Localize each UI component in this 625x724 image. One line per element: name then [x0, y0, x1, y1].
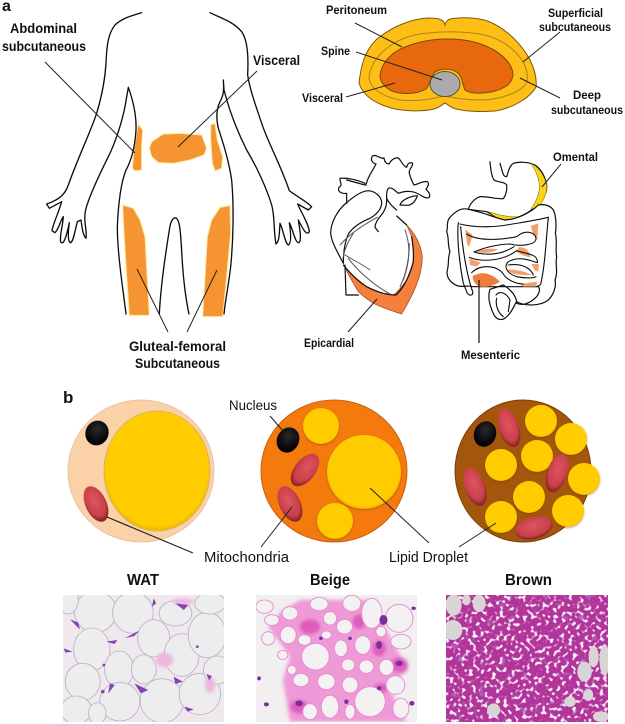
cross-section labels: Visceral — [302, 93, 343, 105]
leader lines: cells — [107, 416, 496, 553]
cross-section labels — [302, 5, 623, 117]
cell: beige adipocyte — [261, 400, 407, 542]
label: Gluteal-femoral Subcutaneous: Gluteal-femoral — [129, 339, 226, 354]
label: Visceral: Visceral — [253, 53, 300, 68]
spine — [430, 72, 460, 96]
small intestine outlines — [467, 232, 537, 284]
label: Mitochondria: Mitochondria — [204, 550, 290, 566]
illustration: heart with epicardial fat — [331, 155, 430, 314]
label: Abdominal subcutaneous: subcutaneous — [2, 39, 86, 54]
label: Gluteal-femoral Subcutaneous: Subcutaneous — [135, 356, 220, 371]
label: Nucleus: Nucleus — [229, 397, 277, 413]
fascia line — [369, 32, 527, 101]
epicardial fat — [345, 225, 422, 314]
histology: Brown — [443, 594, 610, 722]
mitochondrion — [78, 482, 114, 526]
cross-section labels: subcutaneous — [539, 22, 611, 34]
stomach — [468, 162, 547, 220]
body outline — [47, 13, 312, 314]
histology: Beige — [256, 595, 417, 722]
label: Omental: Omental — [553, 150, 598, 164]
panel: body depots — [47, 13, 312, 317]
subcutaneous layer — [359, 18, 536, 112]
mitochondria — [285, 449, 325, 491]
cross-section labels: Deep — [573, 90, 601, 102]
large intestine — [447, 205, 557, 320]
pink stroma network — [268, 600, 408, 722]
leader lines: cross-section — [346, 23, 560, 98]
nucleus — [81, 417, 113, 449]
leader lines: intestines — [479, 164, 561, 343]
label: Abdominal subcutaneous — [2, 21, 86, 54]
histology: WAT — [63, 595, 224, 722]
inner colon edges — [458, 217, 548, 317]
title: Brown: Brown — [505, 572, 552, 589]
omental fat — [488, 163, 547, 220]
illustration: intestines with omental and mesenteric fat — [447, 162, 557, 320]
cell: brown adipocyte — [455, 400, 600, 544]
label: Mesenteric: Mesenteric — [461, 348, 520, 362]
cross-section labels: Peritoneum — [326, 5, 387, 17]
label: Abdominal subcutaneous: Abdominal — [10, 21, 77, 36]
mesenteric fat patches — [465, 223, 539, 287]
panel b label: b — [63, 388, 73, 407]
label: Gluteal-femoral Subcutaneous — [129, 339, 226, 371]
title: WAT: WAT — [127, 572, 159, 589]
title: Beige: Beige — [310, 572, 350, 589]
cell: white adipocyte — [68, 400, 214, 542]
lipid droplets — [303, 408, 401, 539]
visceral cavity — [380, 39, 513, 93]
mitochondria — [493, 406, 525, 450]
lipid droplets — [485, 405, 600, 533]
label: Epicardial: Epicardial — [304, 336, 354, 350]
leader lines: body — [45, 62, 257, 332]
cross-section labels: Superficial — [548, 8, 603, 20]
label: Lipid Droplet: Lipid Droplet — [389, 550, 468, 566]
cross-section labels: Spine — [321, 46, 350, 58]
nucleus — [273, 424, 303, 456]
panel: abdominal cross-section — [359, 18, 536, 112]
fat: abdominal subcutaneous and visceral — [123, 123, 231, 317]
leader: epicardial — [348, 299, 377, 332]
nucleus — [470, 418, 500, 450]
